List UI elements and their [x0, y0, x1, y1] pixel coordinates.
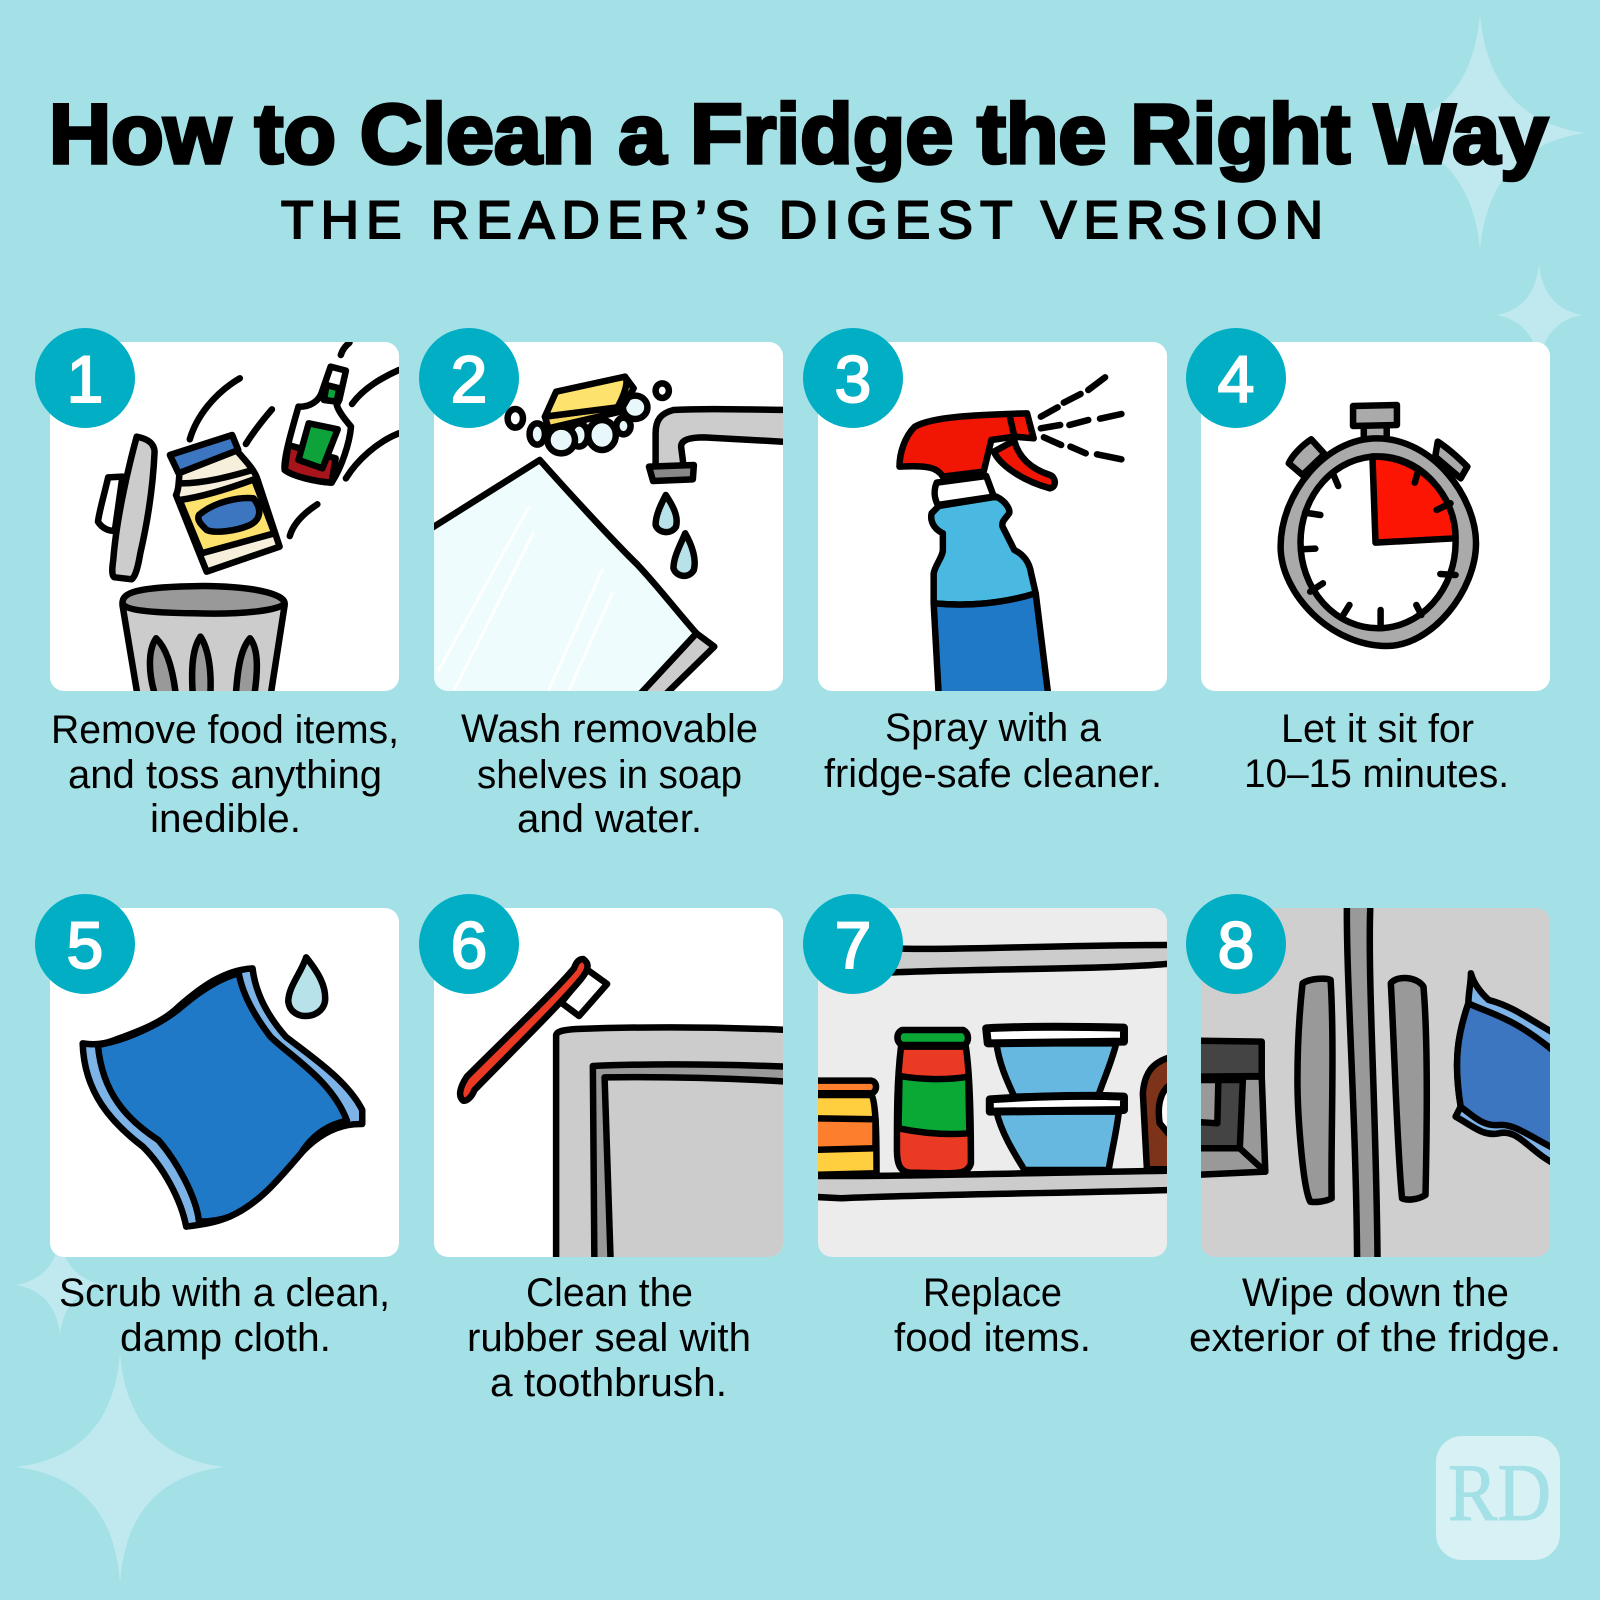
- illustration: damp cloth: [83, 957, 362, 1227]
- caption 3: [824, 706, 1162, 796]
- stopwatch crown and ears: [1289, 405, 1467, 478]
- caption 4: [1244, 707, 1509, 796]
- title: How to Clean a Fridge the Right Way: [49, 87, 1548, 181]
- lower shelf: [810, 1171, 1172, 1198]
- number badge 4: [1186, 328, 1286, 428]
- number badge 3: 3: [835, 342, 871, 416]
- panel: step 6 rubber seal: [419, 894, 788, 1405]
- number badge 6: 6: [451, 908, 487, 982]
- panel: step 3 spray: [803, 328, 1167, 796]
- number badge 2: 2: [451, 342, 487, 416]
- tick marks: [1301, 470, 1456, 625]
- water drop: [288, 957, 325, 1016]
- panel: step 7 replace food: [803, 894, 1172, 1360]
- number badge 6: [419, 894, 519, 994]
- bottle: [931, 476, 1048, 697]
- illustration: stopwatch: [1281, 405, 1476, 646]
- caption 3: fridge-safe cleaner.: [824, 752, 1162, 796]
- water dispenser: [1193, 1041, 1265, 1175]
- soap bar: [545, 377, 634, 428]
- illustration: shelf, soap and faucet: [429, 377, 788, 697]
- illustration: fridge exterior: [1193, 903, 1560, 1263]
- illustration: food tossed in trash: [98, 343, 399, 697]
- caption 5: [59, 1271, 390, 1360]
- caption 7: food items.: [894, 1316, 1091, 1360]
- card background: [818, 342, 1167, 691]
- mayo jar: [170, 435, 280, 572]
- caption 6: Clean the: [526, 1271, 693, 1315]
- yellow jar: [810, 1081, 877, 1175]
- number badge 5: [35, 894, 135, 994]
- caption 7: Replace: [923, 1271, 1062, 1315]
- trash can: [122, 586, 285, 697]
- upper shelf: [887, 945, 1172, 973]
- illustration: refilled shelf: [810, 945, 1172, 1198]
- caption 1: [51, 708, 399, 841]
- card background: [1201, 342, 1550, 691]
- caption 2: shelves in soap: [477, 753, 742, 797]
- water drops: [656, 495, 695, 576]
- number badge 3: [803, 328, 903, 428]
- card background: [818, 908, 1167, 1257]
- trash lid: [98, 437, 155, 579]
- RD logo: [1436, 1436, 1560, 1560]
- panel: step 4 wait: [1186, 328, 1550, 796]
- door gap: [1347, 903, 1378, 1263]
- illustration: spray bottle: [899, 377, 1121, 697]
- soap bubbles: [508, 383, 669, 453]
- caption 2: Wash removable: [461, 707, 758, 751]
- card background: [50, 342, 399, 691]
- toothbrush: [460, 959, 607, 1101]
- number badge 7: [803, 894, 903, 994]
- caption 5: Scrub with a clean,: [59, 1271, 390, 1315]
- RD logo: RD: [1448, 1447, 1551, 1538]
- caption 5: damp cloth.: [120, 1316, 331, 1360]
- card background: [1201, 908, 1550, 1257]
- stacked containers: [986, 1027, 1124, 1170]
- panel: step 8 wipe exterior: [1186, 894, 1561, 1360]
- panel: step 1 remove food: [35, 328, 399, 841]
- red trigger head: [899, 413, 1055, 488]
- caption 4: 10–15 minutes.: [1244, 752, 1509, 796]
- subtitle: THE READER’S DIGEST VERSION: [281, 191, 1323, 250]
- caption 2: [461, 707, 758, 841]
- sauce bottle: [284, 367, 351, 483]
- number badge 1: [35, 328, 135, 428]
- card background: [434, 908, 783, 1257]
- spray dashes: [1041, 377, 1121, 459]
- red and green jar: [897, 1030, 971, 1173]
- card background: [50, 908, 399, 1257]
- caption 6: rubber seal with: [467, 1316, 751, 1360]
- wiping cloth: [1456, 973, 1560, 1167]
- caption 4: Let it sit for: [1281, 707, 1474, 751]
- blue cloth: [83, 968, 362, 1227]
- door handles: [1297, 978, 1427, 1202]
- number badge 2: [419, 328, 519, 428]
- caption 1: Remove food items,: [51, 708, 399, 752]
- panel: step 2 wash shelves: [419, 328, 788, 841]
- caption 1: inedible.: [150, 797, 301, 841]
- glass shelf: [429, 460, 714, 697]
- number badge 4: 4: [1218, 342, 1254, 416]
- number badge 7: 7: [835, 908, 871, 982]
- number badge 5: 5: [67, 908, 103, 982]
- caption 6: [467, 1271, 751, 1405]
- number badge 8: [1186, 894, 1286, 994]
- stopwatch body: [1281, 438, 1476, 646]
- caption 3: Spray with a: [885, 706, 1102, 750]
- panel: step 5 scrub: [35, 894, 399, 1360]
- faucet: [649, 409, 788, 481]
- brown bottle: [1143, 1057, 1172, 1169]
- caption 8: exterior of the fridge.: [1189, 1316, 1561, 1360]
- caption 8: [1189, 1271, 1561, 1360]
- caption 8: Wipe down the: [1242, 1271, 1509, 1315]
- rubber gasket: [593, 1064, 788, 1263]
- card background: [434, 342, 783, 691]
- caption 6: a toothbrush.: [490, 1361, 727, 1405]
- motion lines: [190, 343, 399, 536]
- caption 7: [894, 1271, 1091, 1360]
- fridge door: [556, 1027, 788, 1263]
- illustration: toothbrush and fridge seal: [460, 959, 788, 1263]
- number badge 8: 8: [1218, 908, 1254, 982]
- caption 2: and water.: [517, 797, 702, 841]
- number badge 1: 1: [67, 342, 103, 416]
- caption 1: and toss anything: [68, 753, 382, 797]
